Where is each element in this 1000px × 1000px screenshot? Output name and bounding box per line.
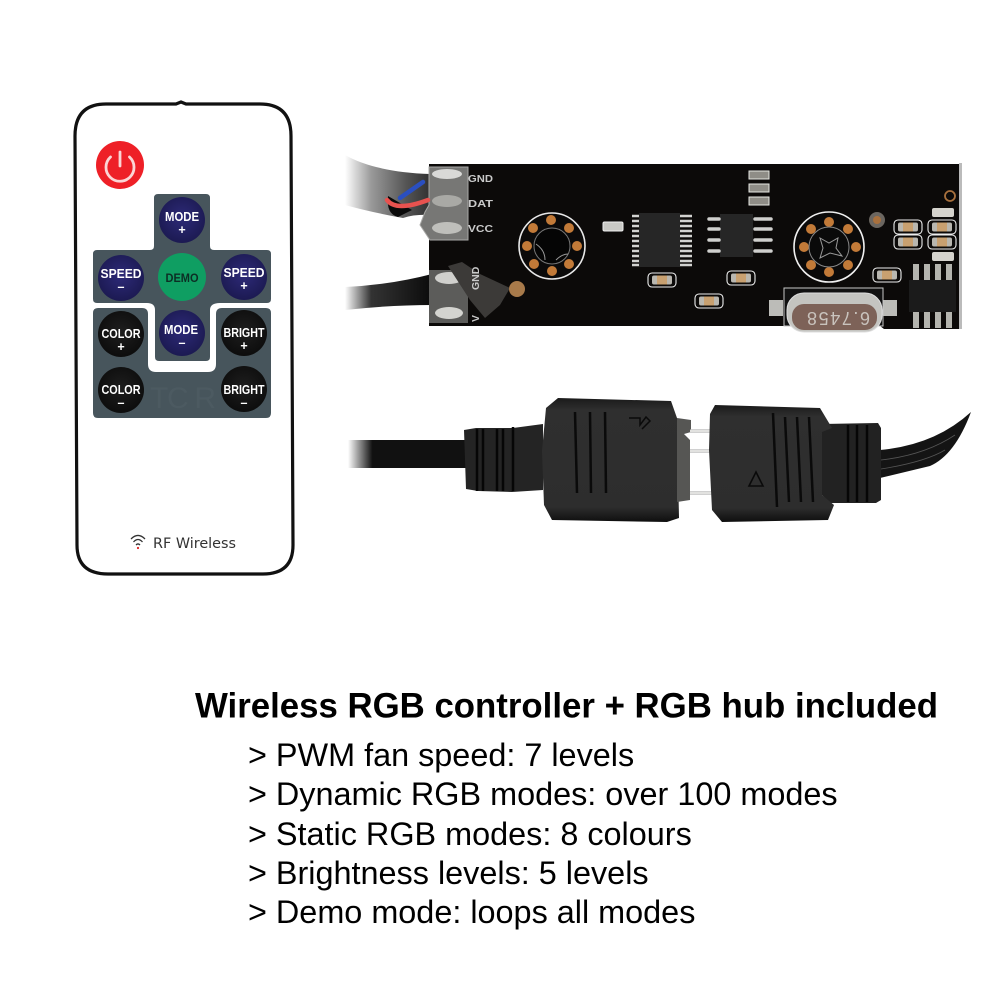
solder pad bbox=[509, 281, 525, 297]
silkscreen labels bbox=[468, 173, 494, 322]
crystal oscillator bbox=[769, 288, 897, 332]
button: speed minus: – bbox=[118, 280, 125, 294]
feature: brightness: > Brightness levels: 5 levels bbox=[248, 855, 649, 891]
connector body right bbox=[709, 405, 834, 522]
button: color minus: – bbox=[118, 396, 125, 410]
feature: static modes: > Static RGB modes: 8 colours bbox=[248, 816, 692, 852]
wire bundle: lower bbox=[345, 274, 432, 310]
keypad: lower plate bbox=[93, 308, 271, 418]
title: Wireless RGB controller + RGB hub included bbox=[195, 686, 938, 726]
remote body bbox=[75, 102, 293, 574]
test points bbox=[869, 191, 955, 228]
crystal marking: 6.7458 bbox=[807, 308, 870, 328]
button: mode plus: + bbox=[178, 223, 186, 237]
capacitors bbox=[648, 208, 956, 308]
feature: dynamic modes: > Dynamic RGB modes: over 100 modes bbox=[248, 776, 838, 812]
icon: wireless signal bbox=[131, 536, 145, 549]
silkscreen labels: VCC bbox=[468, 223, 493, 235]
small resistor bbox=[603, 222, 623, 231]
button: speed plus bbox=[221, 254, 267, 300]
button: bright minus: BRIGHT bbox=[224, 383, 265, 397]
button: speed minus: SPEED bbox=[100, 267, 142, 281]
button: speed minus bbox=[98, 255, 144, 301]
silkscreen labels: DAT bbox=[468, 198, 494, 210]
button: bright minus: – bbox=[241, 396, 248, 410]
white board edge bbox=[959, 163, 962, 329]
strain relief right bbox=[822, 423, 881, 503]
feature: demo mode: > Demo mode: loops all modes bbox=[248, 894, 695, 930]
button: color plus bbox=[98, 311, 144, 357]
silkscreen labels: GND bbox=[468, 173, 493, 185]
cable left bbox=[348, 440, 470, 468]
button: color plus: COLOR bbox=[102, 327, 140, 341]
resistors top bbox=[749, 171, 769, 205]
button: bright minus bbox=[221, 366, 267, 412]
silkscreen labels: V bbox=[470, 315, 482, 322]
keypad: upper cross plate bbox=[93, 194, 271, 361]
lower wire connector bbox=[429, 262, 510, 323]
chip: right IC bbox=[909, 264, 956, 328]
button: color minus: COLOR bbox=[102, 383, 140, 397]
RGB connector pair bbox=[348, 398, 971, 522]
button: mode minus: – bbox=[179, 336, 186, 350]
button: mode plus: MODE bbox=[165, 210, 199, 224]
button: demo bbox=[158, 253, 206, 301]
button: speed plus: SPEED bbox=[224, 266, 264, 280]
button: mode minus bbox=[159, 310, 205, 356]
remote control bbox=[75, 102, 293, 574]
button: speed plus: + bbox=[240, 279, 248, 293]
label: RF Wireless: RF Wireless bbox=[153, 536, 236, 552]
button: mode plus bbox=[159, 197, 205, 243]
feature list bbox=[248, 737, 838, 930]
RGB hub circuit board bbox=[345, 155, 962, 332]
metal pins bbox=[677, 418, 718, 502]
button: color minus bbox=[98, 367, 144, 413]
button: color plus: + bbox=[117, 340, 125, 354]
chip: left IC bbox=[632, 213, 692, 267]
button: bright plus bbox=[221, 310, 267, 356]
strain relief left bbox=[464, 424, 543, 492]
mounting screw left bbox=[519, 213, 585, 279]
button: bright plus: BRIGHT bbox=[224, 326, 265, 340]
connector body left bbox=[542, 398, 679, 522]
upper wire connector bbox=[387, 167, 468, 240]
chip: centre IC bbox=[709, 214, 771, 257]
button: bright plus: + bbox=[240, 339, 248, 353]
faint plate marking: TC R bbox=[150, 382, 216, 415]
feature: fan speed: > PWM fan speed: 7 levels bbox=[248, 737, 634, 773]
board bbox=[429, 164, 962, 329]
button: mode minus: MODE bbox=[164, 323, 198, 337]
button: demo: DEMO bbox=[166, 273, 199, 285]
wire bundle: upper bbox=[345, 155, 432, 218]
wires right bbox=[880, 412, 971, 478]
icon: power button bbox=[96, 141, 144, 189]
silkscreen labels: GND bbox=[470, 266, 482, 290]
mounting screw right bbox=[794, 212, 864, 282]
